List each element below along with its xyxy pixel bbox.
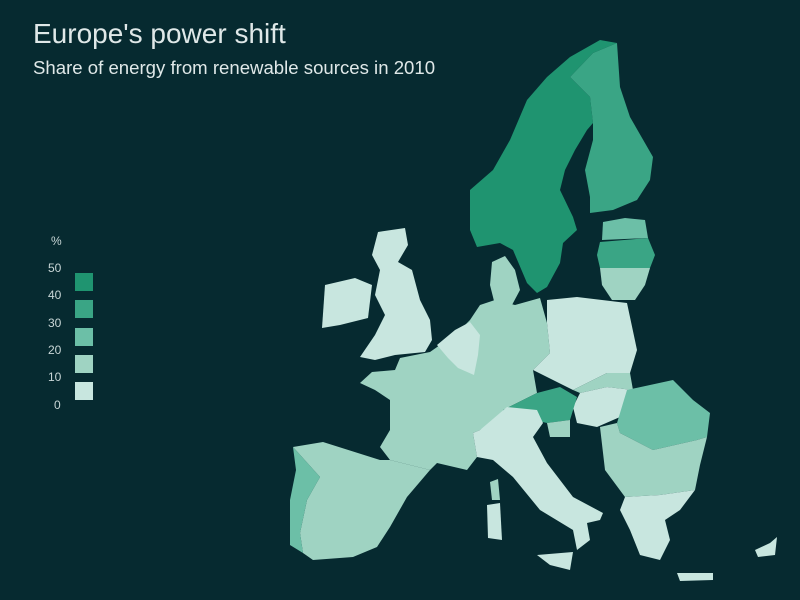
Denmark xyxy=(490,256,520,305)
Bulgaria xyxy=(600,423,707,497)
Sicily xyxy=(537,552,573,570)
Romania xyxy=(617,380,710,450)
Corsica xyxy=(490,479,500,500)
Latvia xyxy=(597,238,655,268)
Spain xyxy=(293,442,430,560)
Ireland xyxy=(322,278,372,328)
Slovenia xyxy=(547,420,570,437)
title: Europe's power shift xyxy=(33,18,286,49)
Cyprus xyxy=(755,537,777,557)
Norway and Sweden xyxy=(470,40,617,293)
legend: % xyxy=(51,234,62,248)
Great Britain xyxy=(360,228,432,360)
legend: 50 xyxy=(48,261,61,275)
subtitle: Share of energy from renewable sources in 2010 xyxy=(33,57,435,78)
Sardinia xyxy=(487,503,502,540)
legend: 40 xyxy=(48,288,61,302)
legend xyxy=(48,234,93,412)
Portugal xyxy=(290,447,320,553)
Poland and Czechia xyxy=(533,297,637,390)
Estonia xyxy=(602,218,648,240)
Benelux xyxy=(437,322,480,375)
Crete xyxy=(677,573,713,581)
Hungary xyxy=(573,387,633,427)
legend: 30 xyxy=(48,316,61,330)
France and Germany xyxy=(360,298,550,470)
Finland xyxy=(570,43,653,213)
legend: 20 xyxy=(48,343,61,357)
legend: 0 xyxy=(54,398,61,412)
legend: 10 xyxy=(48,370,61,384)
Italy xyxy=(473,407,603,550)
Austria xyxy=(503,387,577,423)
Slovakia xyxy=(573,373,633,393)
Lithuania xyxy=(600,268,650,300)
Greece xyxy=(620,490,695,560)
